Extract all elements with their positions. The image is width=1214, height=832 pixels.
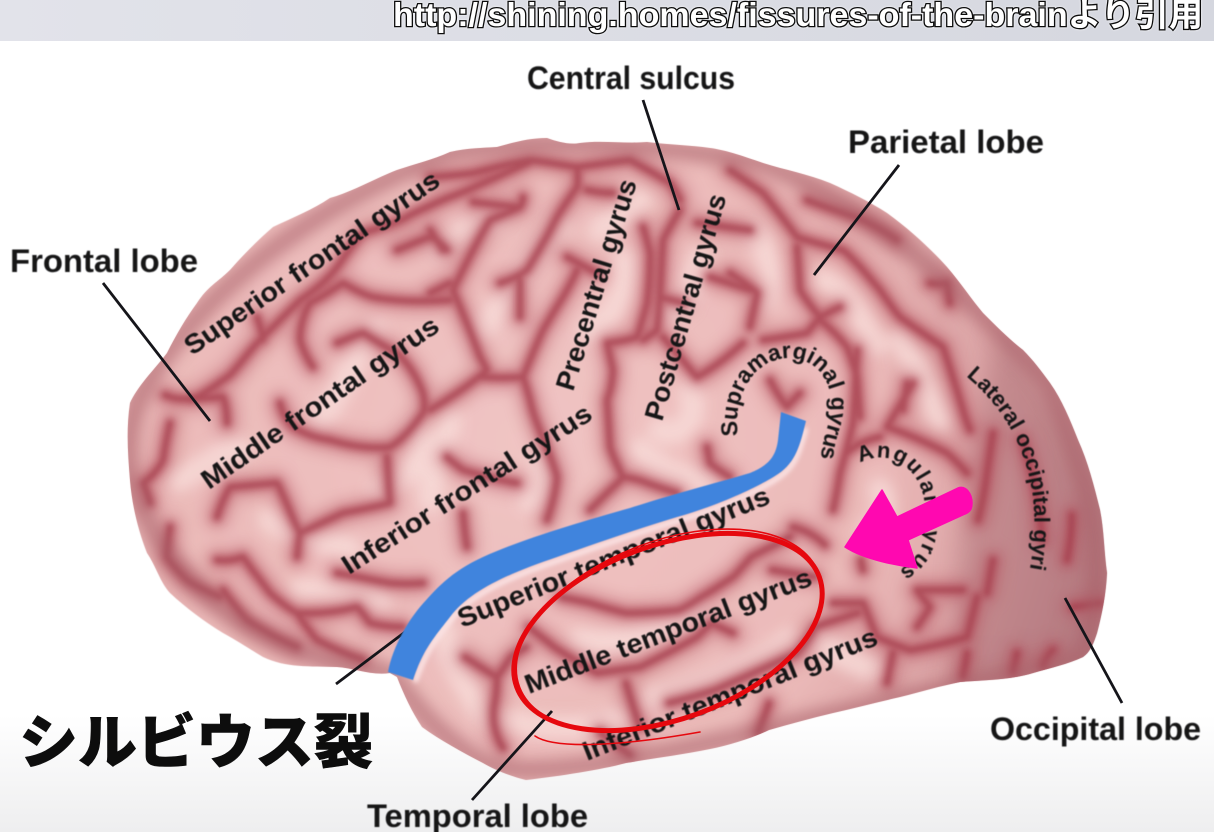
label: Inferior frontal gyrus: Inferior frontal gyrus bbox=[336, 398, 597, 580]
label: Middle frontal gyrus: Middle frontal gyrus bbox=[195, 310, 445, 495]
ellipse stroke bbox=[487, 495, 849, 769]
heading: Occipital lobe: Occipital lobe bbox=[990, 711, 1201, 747]
brain illustration bbox=[128, 138, 1120, 780]
heading: Parietal lobe: Parietal lobe bbox=[848, 124, 1044, 160]
pale glow under blue line bbox=[415, 428, 806, 682]
ellipse tail bbox=[535, 732, 700, 745]
leader line: Frontal lobe bbox=[103, 283, 210, 421]
label: Precentral gyrus: Precentral gyrus bbox=[550, 176, 643, 394]
curved label: Angular gyrus: Angular gyrus bbox=[860, 444, 938, 578]
pink arrow bbox=[845, 487, 972, 568]
Japanese caption: Sylvian fissure: シルビウス裂 bbox=[19, 710, 373, 776]
curved label: Supramarginal gyrus: Supramarginal gyrus bbox=[720, 344, 846, 459]
label: Superior frontal gyrus: Superior frontal gyrus bbox=[178, 165, 445, 361]
blue highlight: Sylvian fissure bbox=[388, 412, 806, 680]
ellipse second pass bbox=[488, 490, 850, 770]
heading: Central sulcus: Central sulcus bbox=[527, 60, 735, 96]
top citation bar bbox=[0, 0, 1214, 41]
label: Middle temporal gyrus: Middle temporal gyrus bbox=[520, 562, 816, 700]
leader line: Parietal lobe bbox=[814, 165, 899, 275]
leader line: Occipital lobe bbox=[1065, 598, 1122, 703]
gyrus labels bbox=[178, 165, 1052, 767]
curved label: Lateral occipital gyri: Lateral occipital gyri bbox=[966, 365, 1052, 571]
label: Inferior temporal gyrus: Inferior temporal gyrus bbox=[578, 622, 882, 767]
label: Postcentral gyrus: Postcentral gyrus bbox=[639, 190, 732, 424]
leader line: Sylvian fissure bbox=[336, 617, 425, 684]
heading: Frontal lobe: Frontal lobe bbox=[10, 243, 198, 279]
leader line: Central sulcus bbox=[643, 100, 679, 210]
label: Superior temporal gyrus: Superior temporal gyrus bbox=[453, 481, 774, 634]
red hand-drawn ellipse around middle temporal gyrus bbox=[487, 490, 850, 770]
brain outline and base colour bbox=[128, 138, 1107, 780]
brain shading and sulci bbox=[129, 144, 1120, 770]
leader line: Temporal lobe bbox=[472, 711, 552, 800]
